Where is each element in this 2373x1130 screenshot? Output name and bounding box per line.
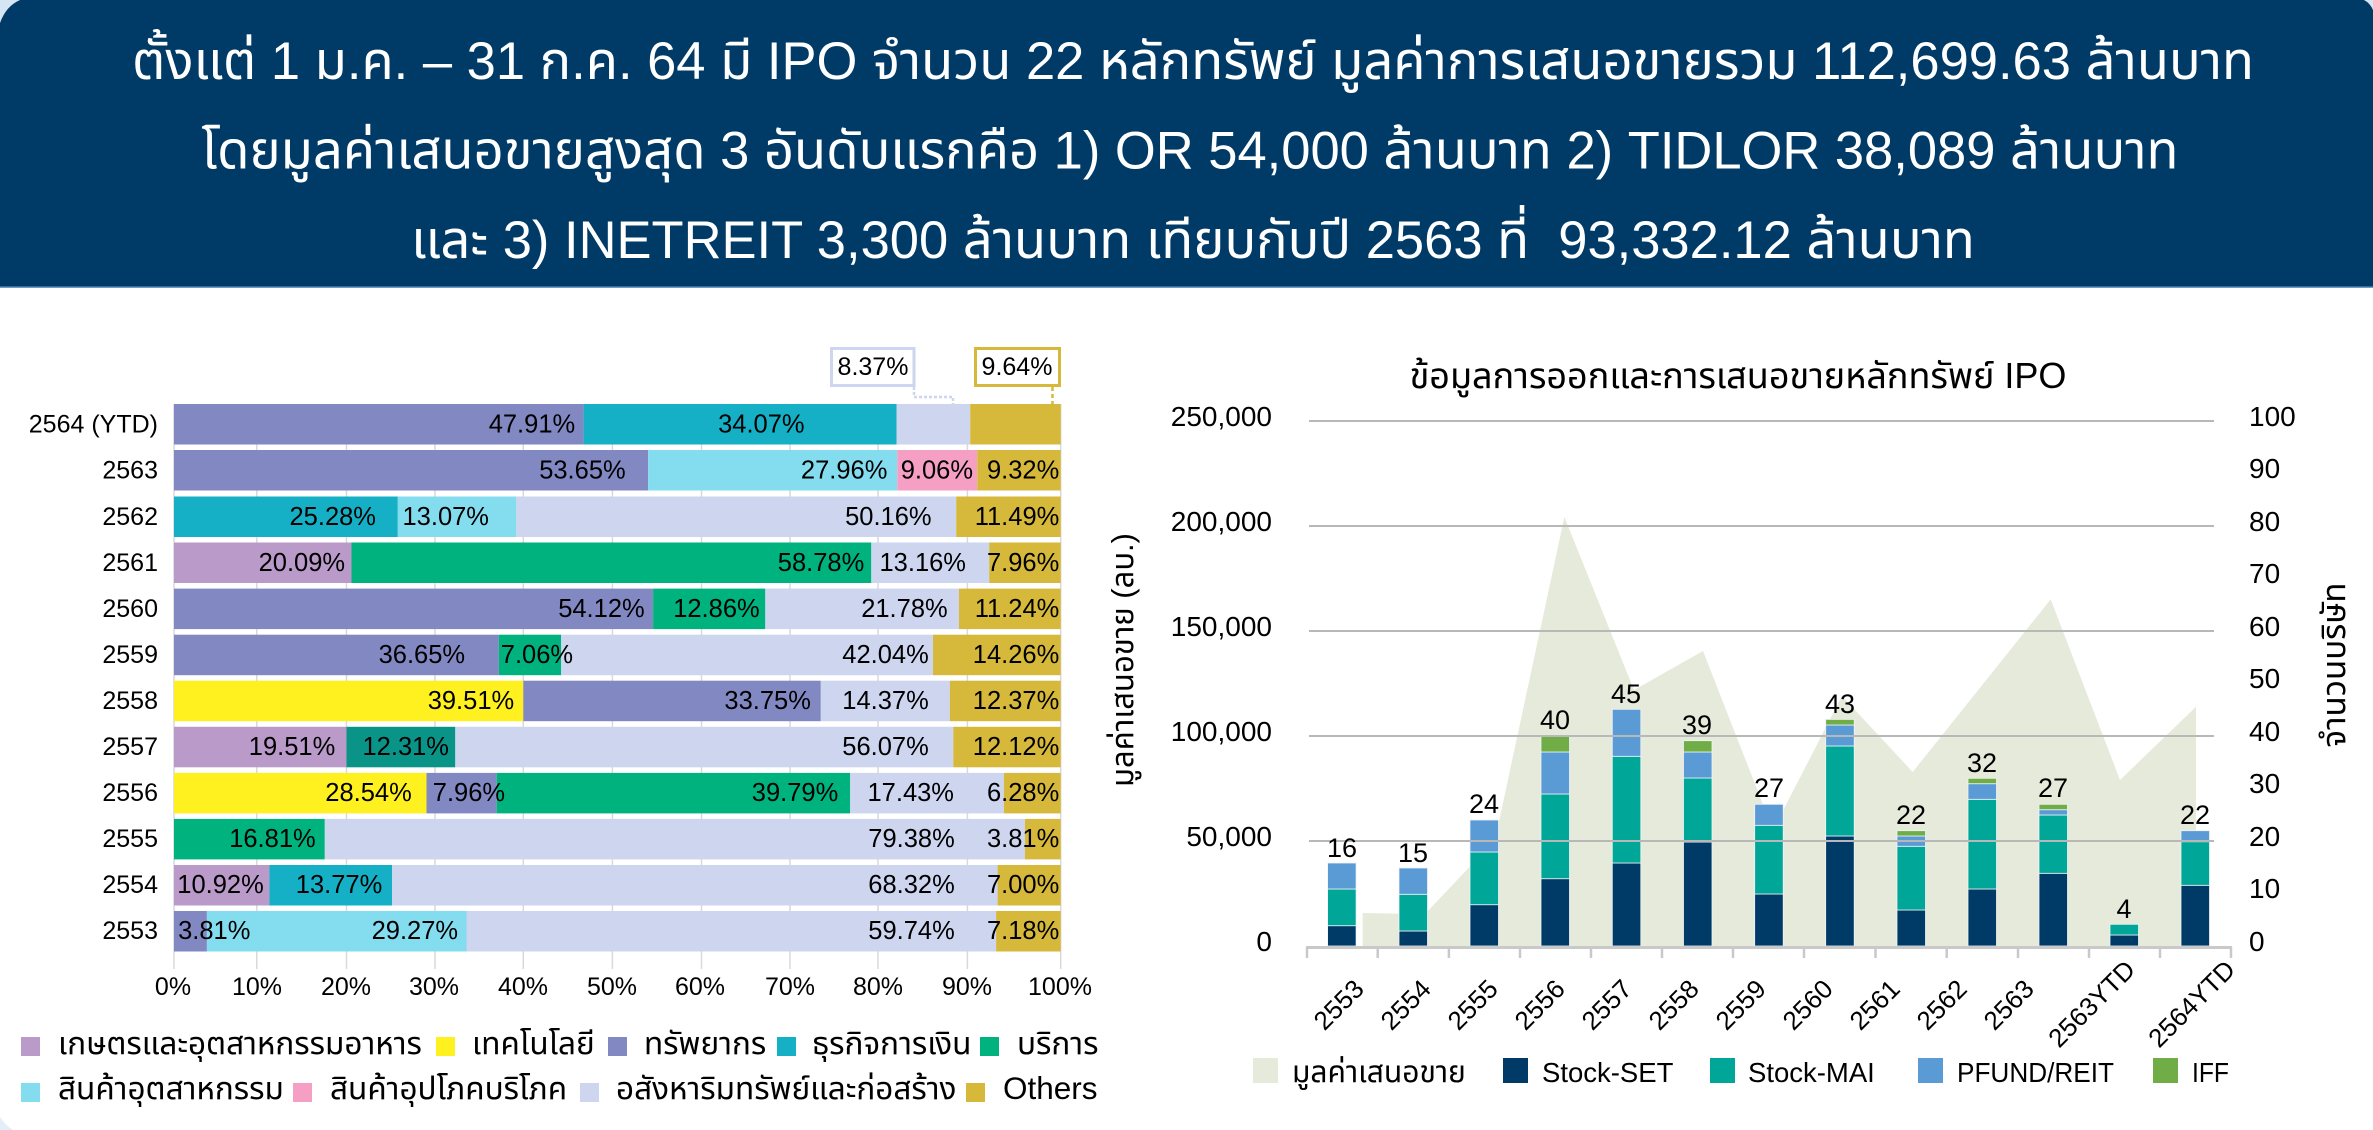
legend: sectors: บริการ [1017,1025,1098,1061]
bar 2556: 7.96% [433,779,505,807]
category labels: 2555 [102,825,158,853]
category labels: 2554 [102,871,158,899]
category labels: 2557 [102,733,158,761]
bar 2562 [174,496,1061,537]
legend: issuance: มูลค่าเสนอขาย [1292,1056,1466,1090]
callout: 8.37% [832,348,953,404]
bar 2558: 12.37% [973,687,1059,715]
bar 2560: 21.78% [861,595,948,623]
year axis labels: 2563 [1978,974,2040,1036]
right count axis: 80 [2249,506,2280,537]
legend: sectors: เทคโนโลยี [472,1025,595,1061]
chart title: ข้อมูลการออกและการเสนอขายหลักทรัพย์ IPO [1410,355,2066,397]
bar 2563 [2039,804,2068,946]
percent axis: 40% [498,973,548,1001]
right count axis: 0 [2249,926,2265,957]
bar 2564: 47.91% [489,410,575,438]
percent axis: 100% [1028,973,1092,1001]
bar 2558 [1684,741,1712,946]
right count axis: 90 [2249,453,2280,484]
bar 2562: 13.07% [402,503,489,531]
bar 2559: 14.26% [973,641,1059,669]
legend: sectors: ทรัพยากร [644,1025,766,1061]
bar 2562: 25.28% [290,503,376,531]
bar 2556: 39.79% [752,779,838,807]
bar 2554 [174,865,1061,906]
percent axis: 90% [942,973,992,1001]
category labels: 2561 [102,549,158,577]
bar 2555: 16.81% [229,825,316,853]
bar 2557 [1612,709,1641,946]
right count axis: 40 [2249,716,2280,747]
year axis labels: 2558 [1643,974,1705,1036]
bar 2559: 7.06% [501,641,573,669]
legend: issuance: Stock-MAI [1748,1057,1875,1088]
company count labels: 45 [1611,679,1641,709]
bar 2556 [174,773,1061,813]
bar 2563: 53.65% [539,456,626,484]
left value axis: 150,000 [1171,611,1272,642]
bar 2558: 14.37% [842,687,929,715]
bar 2553: 29.27% [372,917,458,945]
company count labels: 16 [1327,833,1357,863]
legend: sectors: สินค้าอุตสาหกรรม [58,1070,284,1107]
bar 2555: 79.38% [868,825,955,853]
year axis labels: 2564YTD [2142,954,2241,1053]
bar 2560: 11.24% [975,595,1059,623]
company count labels: 22 [2180,800,2210,830]
left axis title: มูลค่าเสนอขาย (ลบ.) [1105,533,1141,787]
year axis labels: 2560 [1777,974,1839,1036]
headline line 2: โดยมูลค่าเสนอขายสูงสุด 3 อันดับแรกคือ 1) OR 54,000 ล้านบาท 2) TIDLOR 38,089 ล้านบาท [202,122,2178,182]
stacked bars [1328,709,2210,946]
year axis labels: 2563YTD [2042,954,2141,1053]
headline line 1: ตั้งแต่ 1 ม.ค. – 31 ก.ค. 64 มี IPO จำนวน 22 หลักทรัพย์ มูลค่าการเสนอขายรวม 112,699.63 ล้านบาท [132,29,2254,93]
bar 2553: 3.81% [178,917,250,945]
left value axis [1171,401,1272,957]
percent axis: 30% [409,973,459,1001]
legend: sectors: Others [1003,1070,1098,1106]
legend: sectors [21,1025,1098,1107]
bar 2564 [174,404,1061,444]
callout: 9.64% [976,348,1060,404]
company count labels: 43 [1825,689,1855,719]
category labels: 2558 [102,687,158,715]
bar 2561 [1897,831,1926,946]
bar 2560 [174,589,1061,629]
bar 2561 [174,542,1061,583]
panel: IPO issuance combo chart [1105,355,2352,1090]
right count axis: 30 [2249,768,2280,799]
year axis labels: 2555 [1442,974,1504,1036]
bar 2556: 6.28% [987,779,1059,807]
right count axis: 100 [2249,401,2296,432]
left value axis: 0 [1256,926,1272,957]
area: offering value [1363,517,2196,946]
percent axis: 70% [765,973,815,1001]
bar 2560: 12.86% [673,595,760,623]
right count axis: 60 [2249,611,2280,642]
category labels: 2563 [102,456,158,484]
category labels: 2553 [102,917,158,945]
panel: stacked percentage bar chart by sector [29,348,1092,1001]
percent axis: 0% [155,973,191,1001]
bar 2561: 13.16% [880,549,966,577]
bar 2553: 7.18% [987,917,1059,945]
legend: sectors: เกษตรและอุตสาหกรรมอาหาร [58,1025,422,1062]
bar 2562: 50.16% [845,503,932,531]
company count labels: 39 [1682,710,1712,740]
bar 2564YTD [2181,831,2210,946]
header banner [0,0,2373,288]
bar 2557 [174,727,1061,767]
company count labels [1327,679,2210,924]
right axis title: จำนวนบริษัท [2315,583,2352,747]
bar 2559 [174,635,1061,675]
bar 2564: 34.07% [718,410,805,438]
left value axis: 250,000 [1171,401,1272,432]
bar 2555 [174,819,1061,859]
bar 2556: 17.43% [868,779,954,807]
bar 2558: 39.51% [428,687,514,715]
company count labels: 27 [2038,773,2068,803]
percent axis: 80% [853,973,903,1001]
bar 2559: 36.65% [379,641,465,669]
bar 2563: 27.96% [801,456,887,484]
bar 2560 [1826,719,1854,946]
legend: sectors: อสังหาริมทรัพย์และก่อสร้าง [616,1070,956,1106]
percent axis: 10% [232,973,282,1001]
bar 2559: 42.04% [842,641,929,669]
company count labels: 24 [1469,789,1499,819]
company count labels: 15 [1398,838,1428,868]
bar 2559 [1755,804,1783,946]
year axis labels: 2559 [1710,974,1772,1036]
year axis labels: 2561 [1844,974,1906,1036]
bar 2554: 10.92% [177,871,264,899]
percent axis: 20% [321,973,371,1001]
company count labels: 27 [1754,773,1784,803]
bar 2560: 54.12% [558,595,645,623]
bar 2557: 12.12% [973,733,1059,761]
bar 2553: 59.74% [868,917,955,945]
year axis labels [1308,954,2241,1053]
left value axis: 50,000 [1186,821,1272,852]
bar 2554: 7.00% [987,871,1059,899]
bar 2557: 56.07% [842,733,929,761]
bar 2563YTD [2110,924,2138,946]
company count labels: 40 [1540,705,1570,735]
legend: issuance: PFUND/REIT [1957,1057,2114,1088]
right count axis: 10 [2249,873,2280,904]
bar 2562 [1968,778,1996,946]
bar 2556 [1541,736,1570,946]
percent axis: 60% [675,973,725,1001]
headline line 3: และ 3) INETREIT 3,300 ล้านบาท เทียบกับปี 2563 ที่ 93,332.12 ล้านบาท [411,205,1975,270]
percent axis: 50% [587,973,637,1001]
bar 2561: 7.96% [987,549,1059,577]
right count axis: 20 [2249,821,2280,852]
bar 2557: 12.31% [362,733,449,761]
category labels: 2556 [102,779,158,807]
bar 2553 [174,911,1061,952]
company count labels: 32 [1967,748,1997,778]
legend: sectors: สินค้าอุปโภคบริโภค [330,1070,567,1107]
legend: issuance: Stock-SET [1542,1057,1674,1088]
legend: issuance: IFF [2192,1057,2229,1088]
right count axis: 70 [2249,558,2280,589]
bar 2558 [174,681,1061,721]
bar 2561: 58.78% [778,549,864,577]
percent axis [155,973,1092,1001]
bar 2558: 33.75% [724,687,811,715]
bar 2553 [1328,863,1356,946]
right count axis: 50 [2249,663,2280,694]
bar 2563: 9.32% [987,456,1059,484]
category labels: 2559 [102,641,158,669]
bar 2562: 11.49% [975,503,1059,531]
year axis labels: 2554 [1375,974,1437,1036]
bar 2557: 19.51% [249,733,335,761]
company count labels: 22 [1896,800,1926,830]
bar 2556: 28.54% [325,779,412,807]
company count labels: 4 [2116,894,2132,924]
bar 2563 [174,450,1061,490]
left value axis: 200,000 [1171,506,1272,537]
legend: issuance [1253,1056,2229,1090]
category labels: 2560 [102,595,158,623]
bar 2561: 20.09% [259,549,345,577]
bar 2563: 9.06% [901,456,973,484]
bar 2555: 3.81% [987,825,1059,853]
category labels: 2564 (YTD) [29,410,158,438]
bar 2555 [1470,820,1498,946]
year axis labels: 2562 [1911,974,1973,1036]
bar 2554: 68.32% [868,871,955,899]
bar 2554 [1399,868,1428,946]
bar 2554: 13.77% [296,871,382,899]
category labels [29,410,158,945]
year axis labels: 2557 [1576,974,1638,1036]
left value axis: 100,000 [1171,716,1272,747]
year axis labels: 2553 [1308,974,1370,1036]
category labels: 2562 [102,503,158,531]
right count axis [2249,401,2296,957]
callout: 8.37%: 8.37% [838,353,908,381]
year axis labels: 2556 [1509,974,1571,1036]
callout: 9.64%: 9.64% [982,353,1052,381]
legend: sectors: ธุรกิจการเงิน [812,1025,972,1062]
